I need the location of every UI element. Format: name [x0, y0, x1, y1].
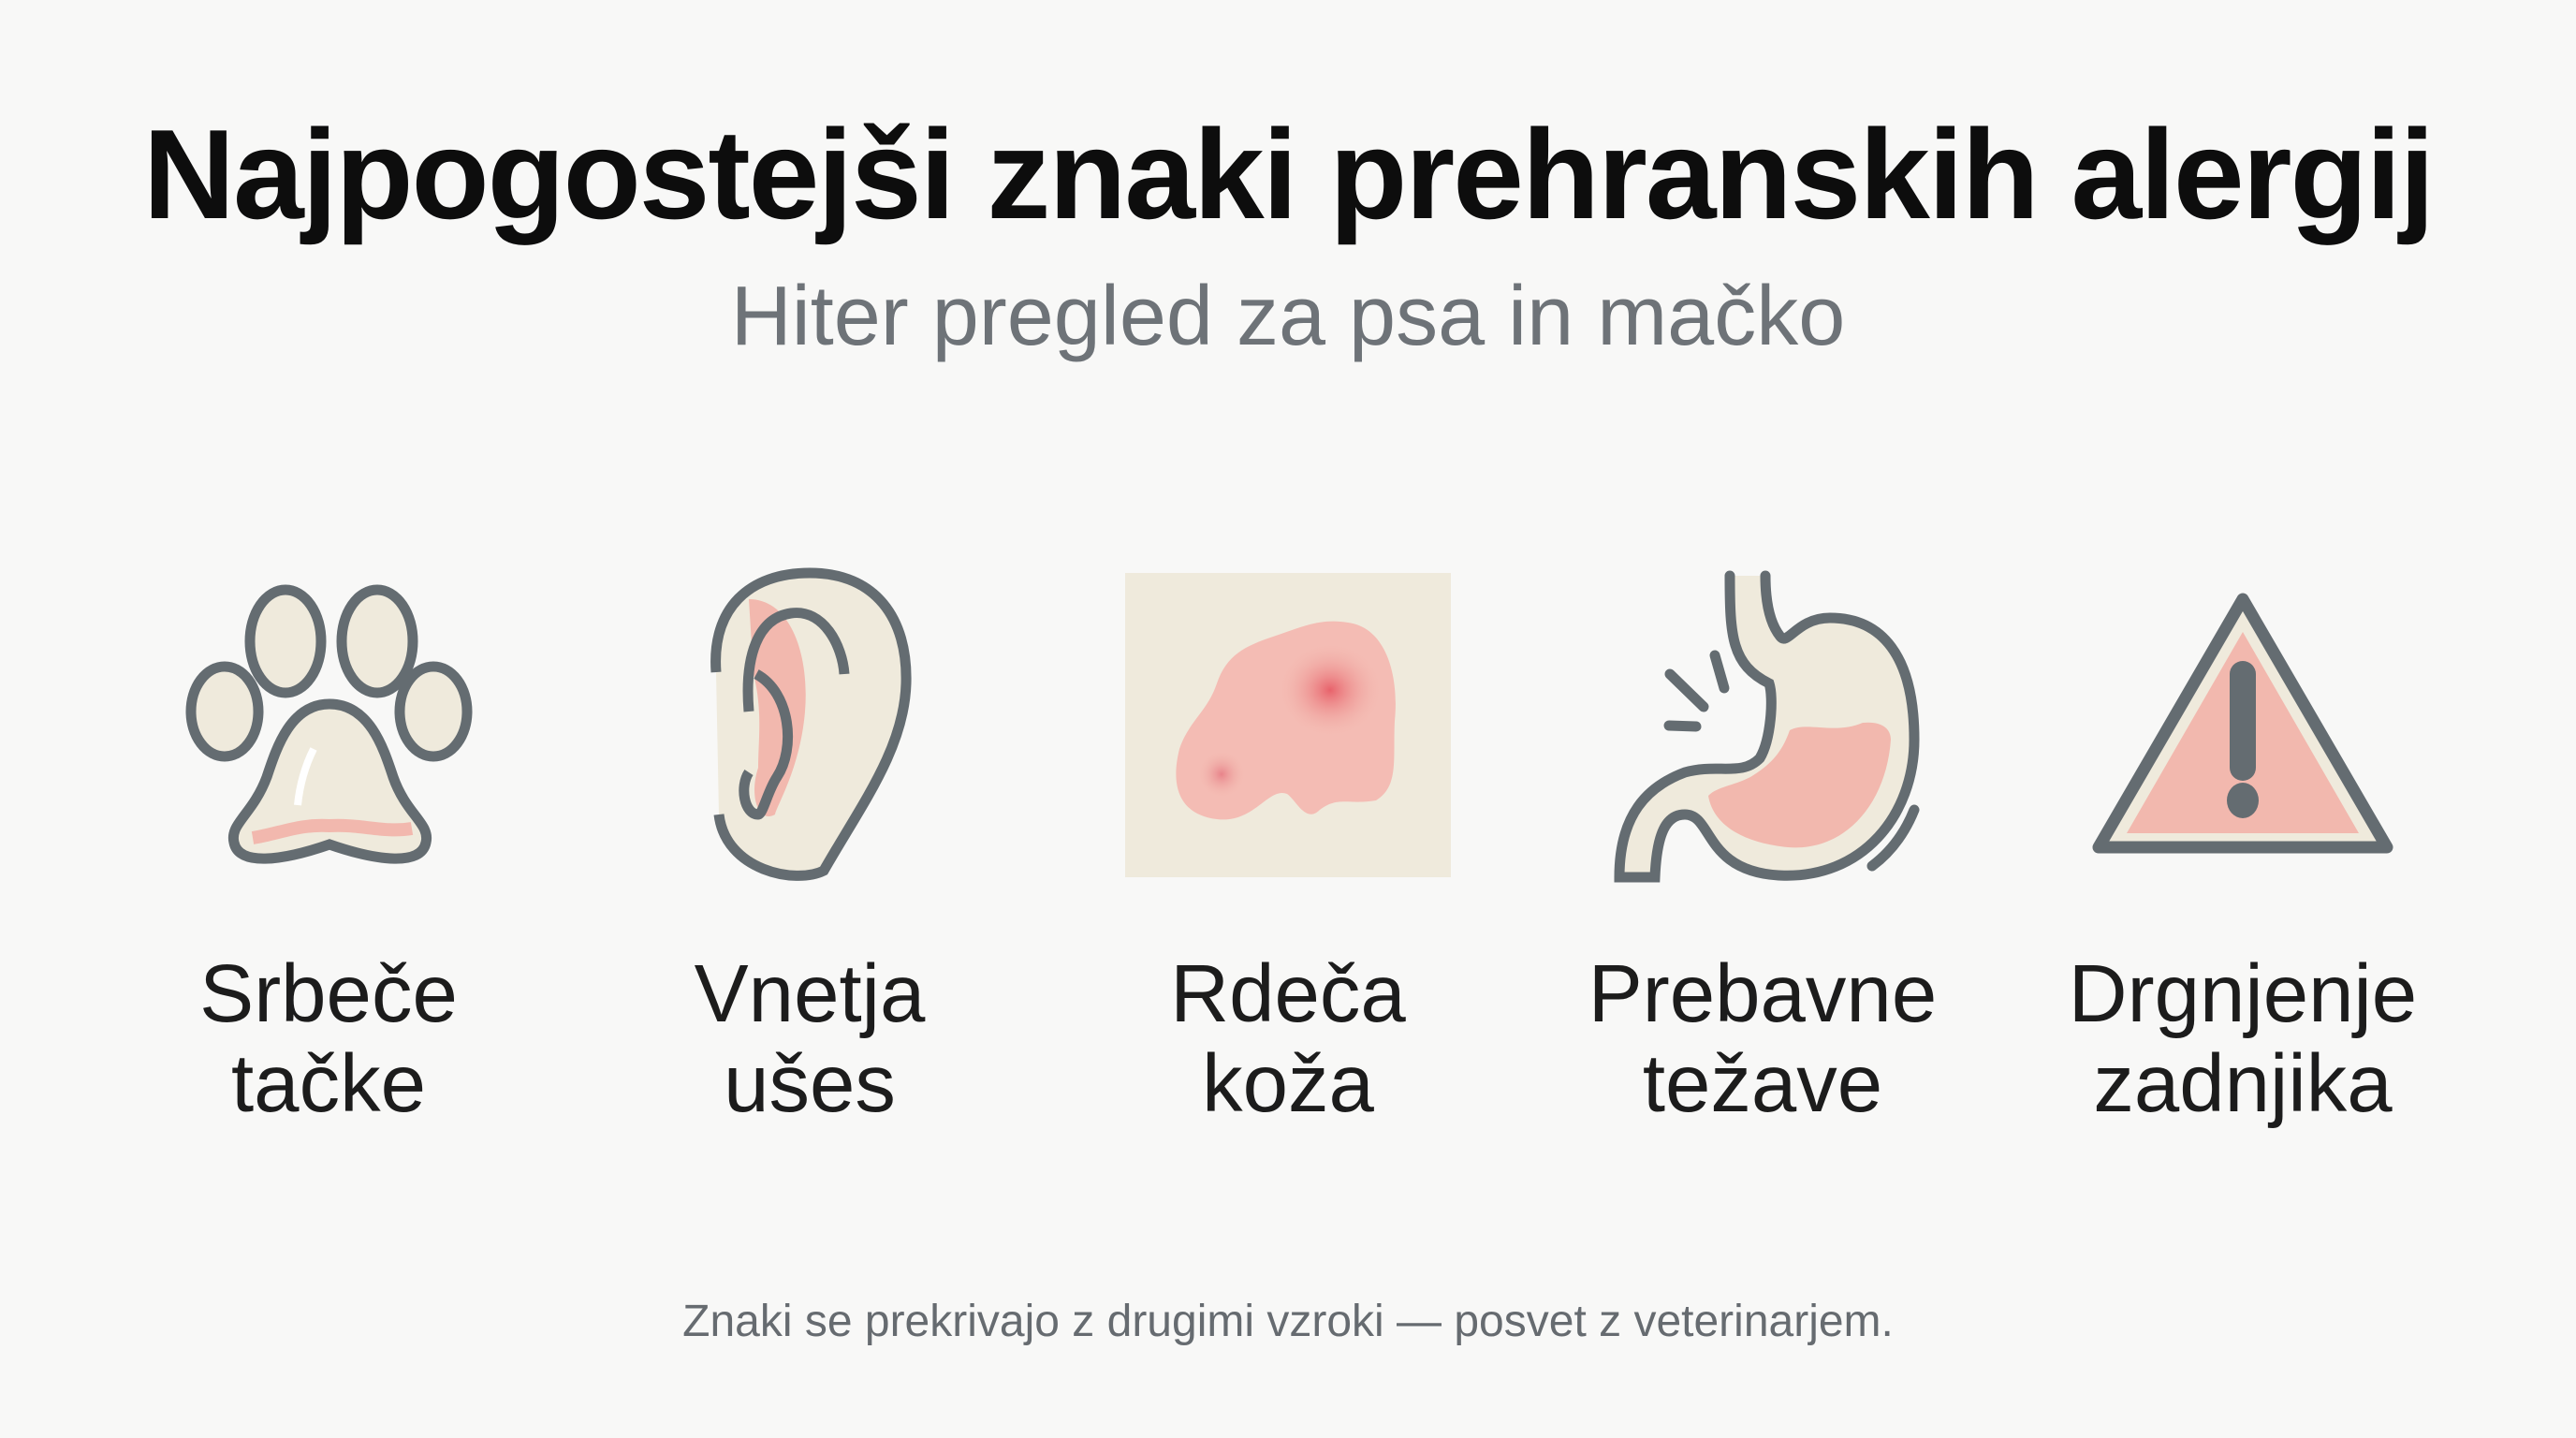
icon: stomach	[1619, 576, 1914, 877]
label: ears	[695, 948, 925, 1129]
subtitle: Hiter pregled za psa in mačko	[731, 270, 1845, 363]
icon: ear	[716, 573, 906, 875]
label: skin: koža	[1202, 1038, 1374, 1129]
label: rubbing	[2069, 948, 2417, 1129]
label: paws: Srbeče	[199, 948, 458, 1039]
title: Najpogostejši znaki prehranskih alergij	[143, 103, 2433, 245]
icon: red skin	[1125, 573, 1451, 877]
label: skin	[1170, 948, 1406, 1129]
label: digestion	[1588, 948, 1937, 1129]
label: ears: Vnetja	[695, 948, 925, 1039]
label: rubbing: Drgnjenje	[2069, 948, 2417, 1039]
icon: paw	[191, 590, 467, 858]
label: ears: ušes	[724, 1038, 896, 1129]
label: rubbing: zadnjika	[2093, 1038, 2393, 1129]
footer note: Znaki se prekrivajo z drugimi vzroki — posvet z veterinarjem.	[682, 1297, 1894, 1346]
label: paws: tačke	[231, 1038, 426, 1129]
icon: warning triangle	[2099, 599, 2387, 847]
label: digestion: Prebavne	[1588, 948, 1937, 1039]
label: digestion: težave	[1643, 1038, 1882, 1129]
label: paws	[199, 948, 458, 1129]
label: skin: Rdeča	[1170, 948, 1406, 1039]
